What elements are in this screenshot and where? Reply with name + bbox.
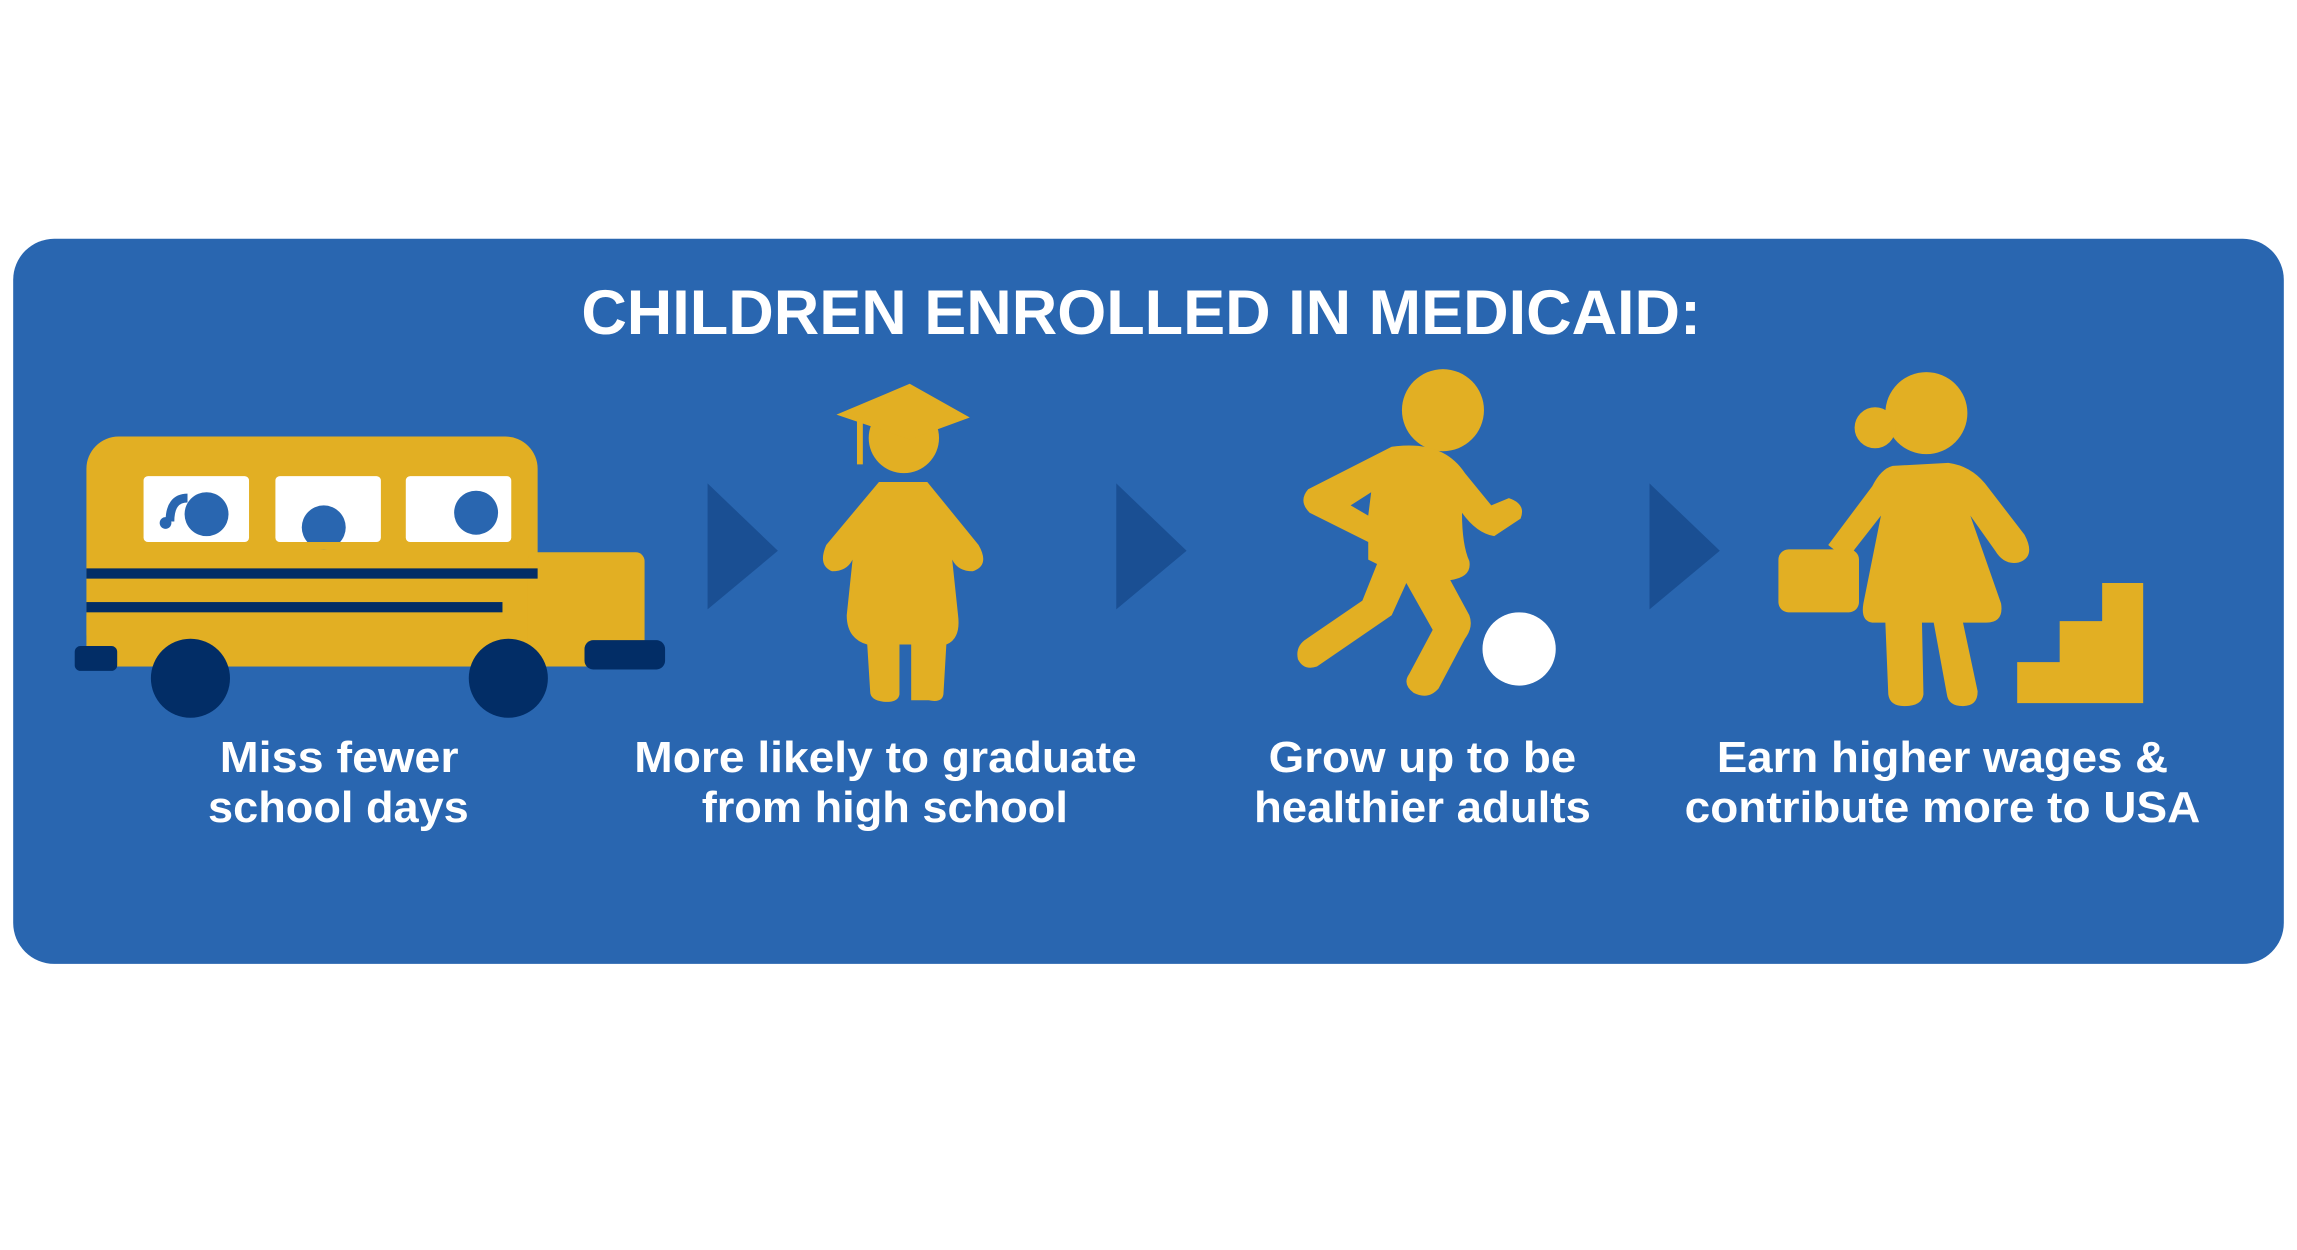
icon: woman with briefcase and stairs — [1778, 372, 2143, 706]
icon: graduate girl — [823, 384, 983, 702]
label 3 line 2: healthier adults — [1254, 783, 1591, 832]
label 2 line 2: from high school — [702, 783, 1068, 832]
label 4 line 2: contribute more to USA — [1685, 783, 2200, 832]
icon: soccer ball — [1483, 612, 1556, 686]
icon: school bus — [75, 437, 665, 718]
panel: main blue background — [13, 239, 2284, 964]
icon: running child with ball — [1297, 369, 1522, 696]
label: healthier adults: Grow up to be — [1269, 733, 1576, 782]
label: graduate: More likely to graduate — [634, 733, 1137, 782]
label: miss fewer school days: Miss fewer — [220, 733, 459, 782]
label: higher wages: Earn higher wages & — [1717, 733, 2168, 782]
label 1 line 2: school days — [208, 783, 469, 832]
arrow 2 — [1116, 483, 1187, 609]
arrow 1 — [708, 483, 778, 609]
title: CHILDREN ENROLLED IN MEDICAID: — [581, 278, 1701, 348]
arrow 3 — [1650, 483, 1720, 609]
